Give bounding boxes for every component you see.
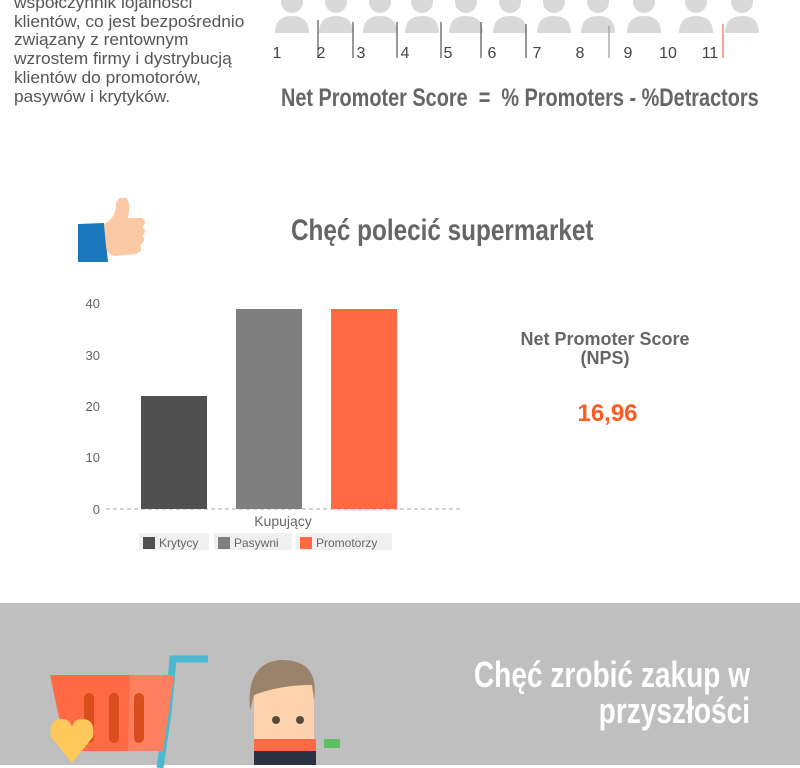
heading: future purchase: przyszłości — [599, 690, 750, 731]
icon: basket — [50, 656, 208, 768]
text block: description: wzrostem firmy i dystrybucją — [14, 49, 232, 68]
scale figures with numbers: 2 — [317, 45, 326, 62]
scale figures with numbers: 6 — [488, 45, 497, 62]
text block: description: klientów, co jest bezpośrednio — [14, 12, 244, 31]
heading: future purchase: Chęć zrobić zakup w — [474, 654, 750, 695]
NPS label: (NPS) — [580, 348, 630, 368]
bar chart: 30 — [86, 348, 100, 363]
text block: description — [14, 0, 244, 106]
NPS label — [520, 329, 690, 368]
scale figures with numbers: 11 — [702, 45, 718, 62]
legend: Krytycy — [159, 536, 198, 550]
text block: description: klientów do promotorów, — [14, 68, 201, 87]
bar chart: 0 — [93, 502, 100, 517]
bar chart: 20 — [86, 399, 100, 414]
scale figures with numbers: 10 — [659, 45, 677, 62]
NPS label: Net Promoter Score — [520, 329, 690, 349]
heading: chęć polecić: Chęć polecić supermarket — [291, 214, 594, 247]
scale figures with numbers: 3 — [357, 45, 366, 62]
icon: thumbs up — [78, 198, 145, 262]
scale figures with numbers — [273, 0, 759, 62]
legend: Pasywni — [234, 536, 279, 550]
legend: Promotorzy — [316, 536, 377, 550]
bar chart: 10 — [86, 450, 100, 465]
bar chart: 40 — [86, 296, 100, 311]
scale figures with numbers: 5 — [444, 45, 453, 62]
panel: future purchase — [0, 603, 800, 765]
NPS value: 16,96 — [577, 400, 638, 427]
bar chart — [86, 296, 460, 550]
scale figures with numbers: 7 — [533, 45, 542, 62]
scale figures with numbers: 8 — [576, 45, 585, 62]
legend — [139, 533, 392, 550]
scale figures with numbers: 1 — [273, 45, 282, 62]
icon: man with money — [250, 660, 340, 765]
text block: description: pasywów i krytyków. — [14, 87, 170, 106]
heading: future purchase — [474, 654, 750, 731]
scale figures with numbers: 9 — [624, 45, 633, 62]
scale figures with numbers: 4 — [401, 45, 410, 62]
formula heading: Net Promoter Score = % Promoters - %Detractors — [281, 84, 759, 112]
text block: description: związany z rentownym — [14, 30, 188, 49]
bar chart: Kupujący — [254, 513, 312, 529]
